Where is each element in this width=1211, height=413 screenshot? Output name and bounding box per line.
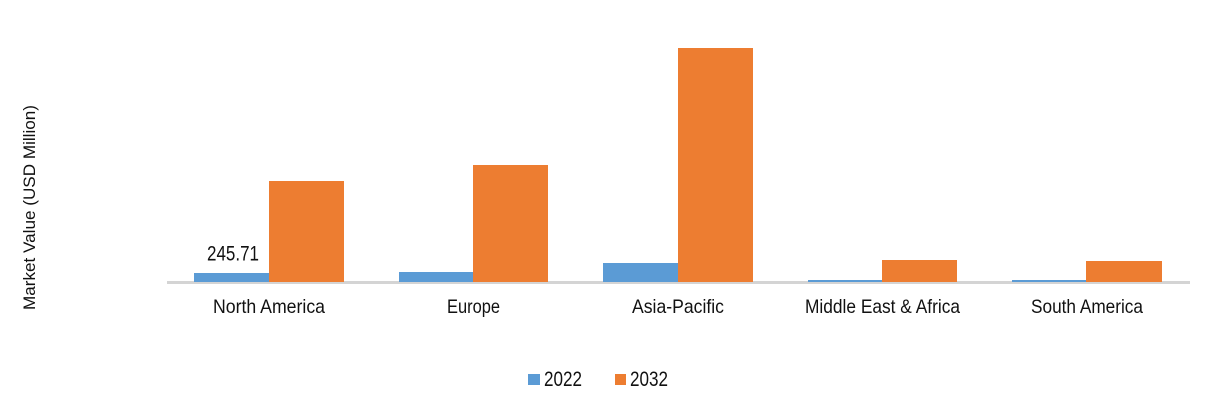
legend xyxy=(528,368,668,391)
group: Europe xyxy=(399,165,548,282)
x axis labels xyxy=(213,296,1143,318)
x axis labels: North America xyxy=(213,296,325,318)
legend: 2022 xyxy=(544,368,582,391)
x axis labels: Middle East & Africa xyxy=(805,296,960,318)
group: South America xyxy=(1012,261,1162,282)
x axis labels: Asia-Pacific xyxy=(632,296,724,318)
x axis labels: Europe xyxy=(447,296,500,318)
group: Asia-Pacific xyxy=(603,48,753,282)
data label: 245.71: 245.71 xyxy=(207,242,259,266)
group: North America xyxy=(194,181,344,282)
y axis title: Market Value (USD Million) xyxy=(20,105,39,310)
group: Middle East & Africa xyxy=(808,260,957,282)
x axis line xyxy=(167,281,1190,284)
legend: 2032 xyxy=(630,368,668,391)
x axis labels: South America xyxy=(1031,296,1143,318)
